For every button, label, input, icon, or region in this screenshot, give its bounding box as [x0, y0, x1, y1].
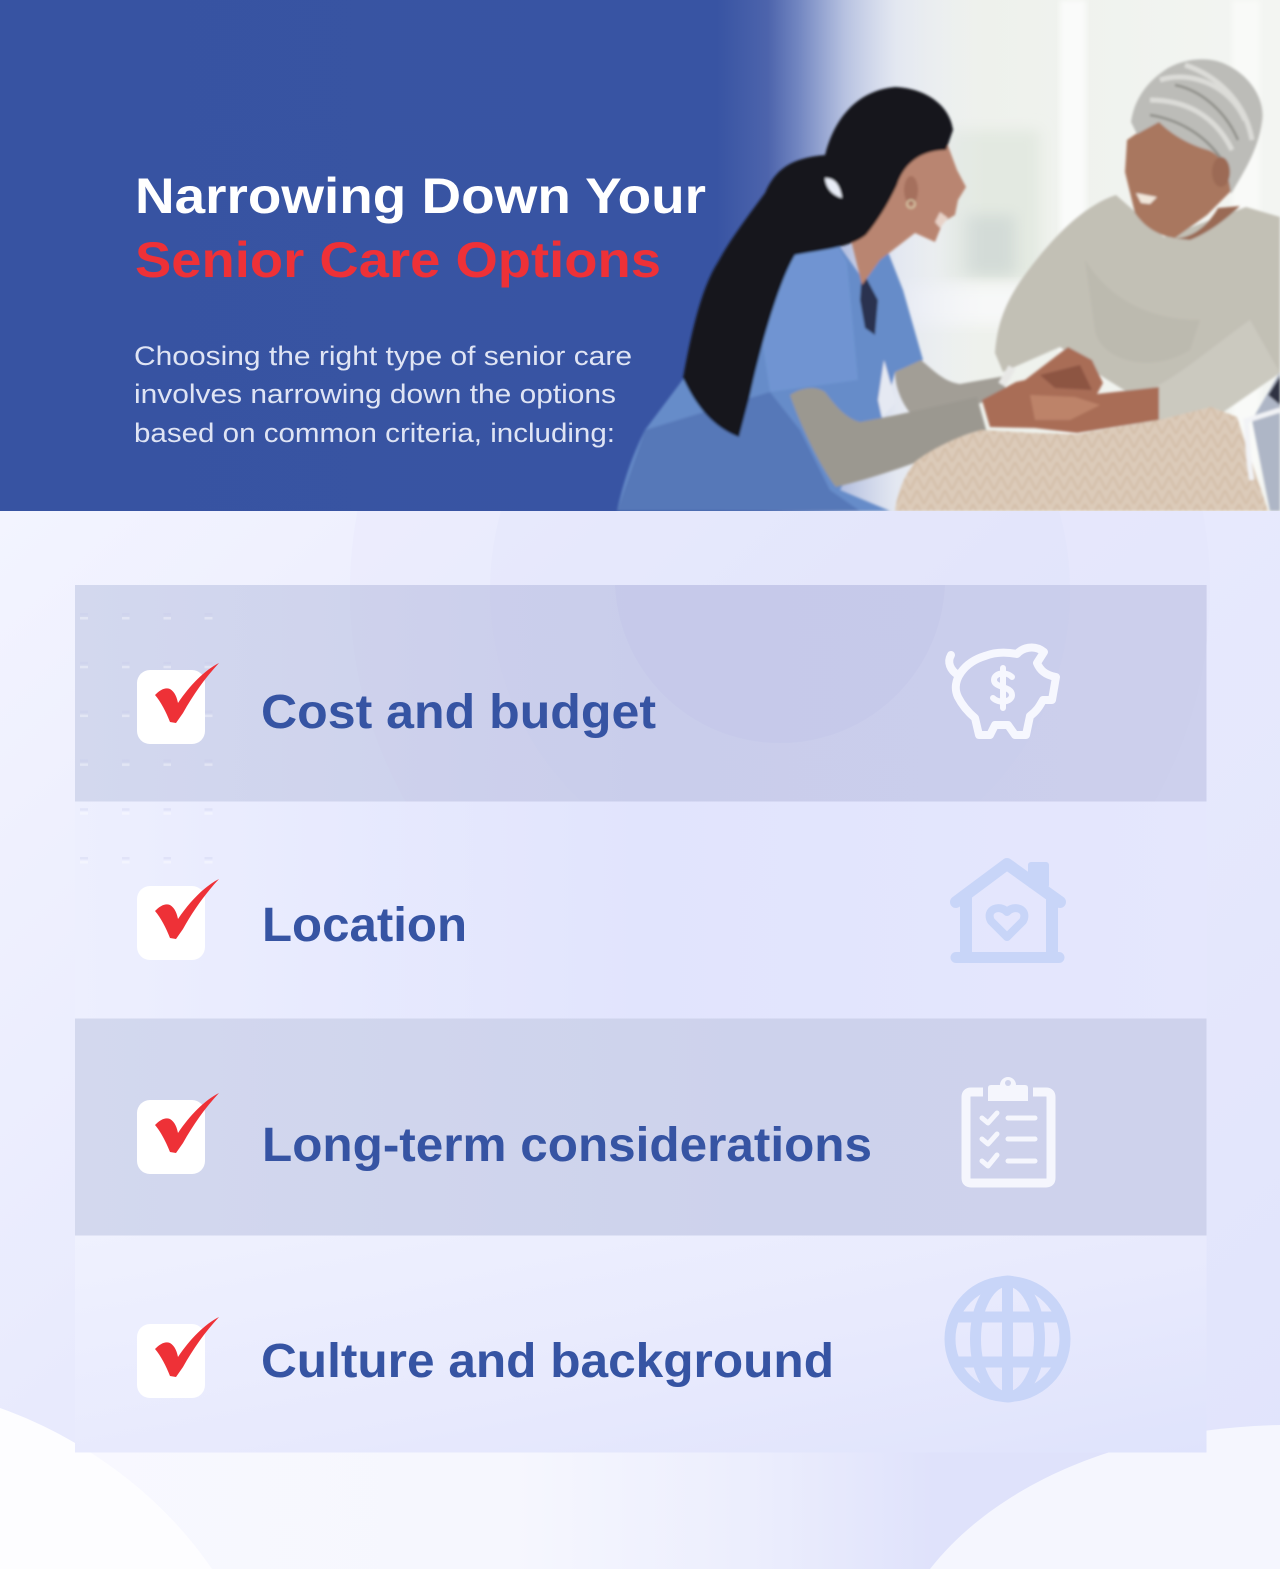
checkbox: [137, 879, 219, 960]
checkbox: [137, 663, 219, 744]
icon: globe: [950, 1281, 1065, 1397]
label: Cost and budget: [261, 686, 656, 739]
icon: clipboard checklist: [966, 1077, 1051, 1183]
nurse hair: [683, 87, 953, 437]
nurse neck and face: [848, 143, 966, 285]
photo: window background: [924, 0, 1280, 511]
intro text block: involves narrowing down the options: [134, 379, 616, 409]
panel: cost and budget: [75, 585, 1206, 802]
photo: nurse and senior: [617, 59, 1280, 511]
senior hair: [1131, 59, 1263, 194]
hands: [982, 347, 1159, 433]
checkbox: [137, 1317, 219, 1398]
senior head: [1125, 118, 1232, 238]
icon: house with heart: [956, 862, 1060, 958]
intro text block: [134, 341, 632, 448]
panel: culture and background: [75, 1236, 1206, 1452]
label: Location: [262, 899, 467, 952]
nurse grey sleeves: [895, 360, 1005, 420]
wheelchair: [1252, 372, 1280, 511]
title: [135, 168, 706, 288]
photo: blue fade: [0, 0, 932, 511]
badge lanyard: [878, 360, 896, 418]
intro text block: based on common criteria, including:: [134, 418, 615, 448]
label: Long-term considerations: [262, 1119, 872, 1172]
lower background: [0, 511, 1280, 1569]
label: Culture and background: [261, 1335, 834, 1388]
title: Narrowing Down Your: [135, 168, 706, 224]
checkbox: [137, 1093, 219, 1174]
icon: piggy bank: [949, 648, 1056, 735]
nurse scrubs: [617, 233, 923, 511]
blanket: [895, 407, 1268, 511]
panel: location: [75, 802, 1206, 1018]
panel: header banner with photo: [0, 0, 1280, 511]
panel: long-term considerations: [75, 1018, 1206, 1236]
title: Senior Care Options: [135, 232, 661, 288]
intro text block: Choosing the right type of senior care: [134, 341, 632, 371]
senior sweater: [994, 194, 1280, 392]
